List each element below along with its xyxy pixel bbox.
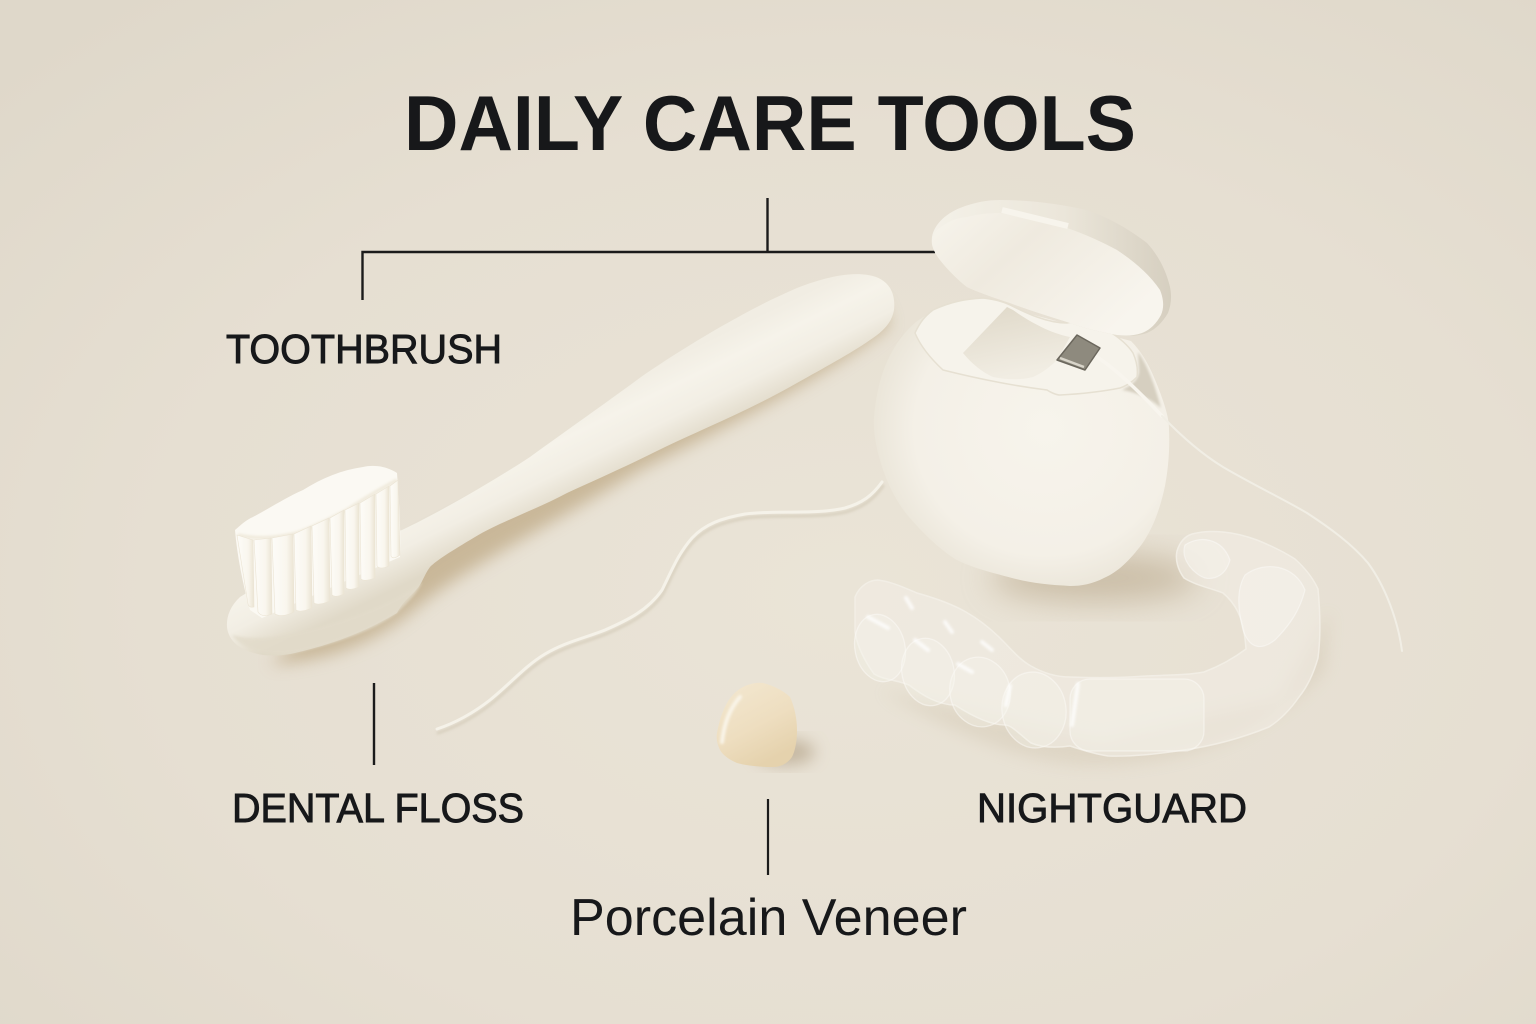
- nightguard back molars: [1184, 540, 1305, 647]
- nightguard highlights: [868, 598, 1078, 725]
- case lid: [932, 200, 1171, 336]
- toothbrush: [227, 274, 894, 664]
- toothbrush head underside: [232, 582, 422, 654]
- case body: [874, 299, 1169, 586]
- label: porcelain veneer: Porcelain Veneer: [570, 889, 967, 947]
- label: dental floss: DENTAL FLOSS: [232, 785, 524, 831]
- title: DAILY CARE TOOLS: [404, 79, 1136, 167]
- floss strand right: [1097, 357, 1402, 651]
- veneer connector: [767, 799, 769, 875]
- nightguard tooth lobes: [848, 610, 1204, 752]
- floss cutter: [1057, 335, 1100, 370]
- dental floss strand left: [437, 482, 883, 733]
- label: nightguard: NIGHTGUARD: [977, 785, 1247, 831]
- case top insert: [915, 298, 1137, 395]
- case slot recess: [963, 307, 1070, 379]
- floss case: [874, 200, 1402, 651]
- connector: title to toothbrush and floss: [362, 198, 935, 300]
- porcelain veneer: [717, 683, 815, 767]
- lid inner face: [932, 213, 1163, 336]
- case body shaded shoulder: [1122, 352, 1161, 408]
- label: toothbrush: TOOTHBRUSH: [226, 326, 502, 372]
- nightguard: [848, 531, 1330, 765]
- bristles: [235, 466, 400, 618]
- connector: dental floss label: [373, 683, 375, 765]
